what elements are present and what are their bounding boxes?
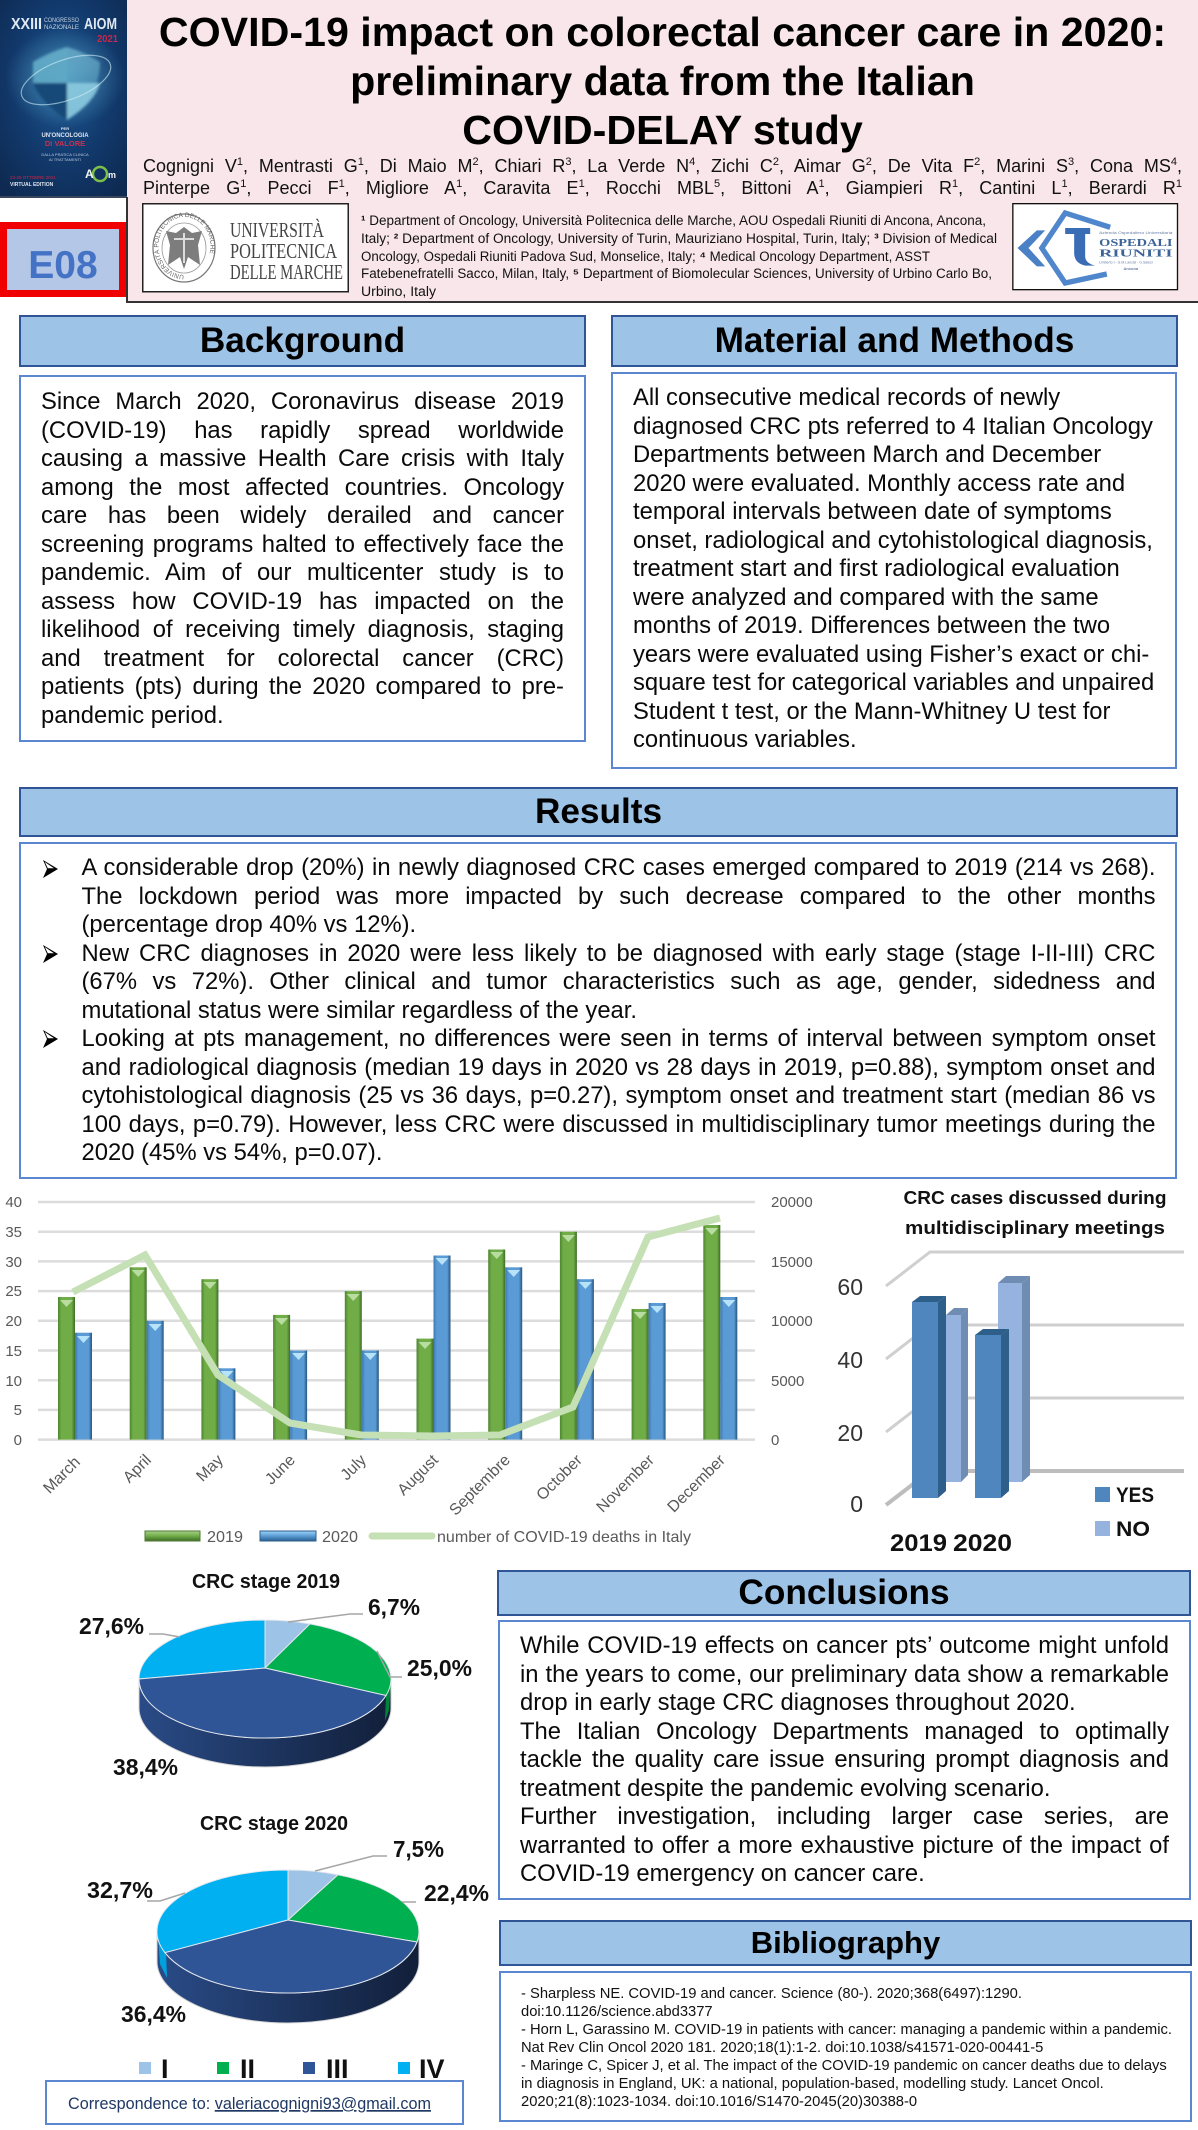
poster code badge E08 <box>0 222 126 297</box>
pie data labels <box>87 1836 489 2027</box>
results bullet text: 100 days, p=0.79). However, less CRC were discussed in multidisciplinary tumor meetings during the <box>82 1110 1156 1138</box>
panel: material and methods text <box>611 372 1177 769</box>
results bullet text: and radiological diagnosis (median 19 days in 2020 vs 28 days in 2019, p=0.88), symptom onset and <box>82 1054 1156 1080</box>
bar top highlights 2020 <box>77 1258 735 1378</box>
bullet 1 <box>43 860 58 878</box>
panel: material and methods text: continuous variables. <box>633 726 857 753</box>
pie data labels: 25,0% <box>407 1655 472 1681</box>
panel: background text: among the most affected countries. Oncology <box>41 474 564 500</box>
heading: Results: Results <box>535 792 662 831</box>
right axis: 0 <box>771 1432 779 1449</box>
pie side <box>157 1932 419 2023</box>
panel: background text: pandemic. Aim of our multicenter study is to <box>41 559 564 586</box>
2019 bars <box>58 1225 720 1440</box>
month labels: November <box>594 1451 658 1516</box>
2019 YES bar <box>912 1296 946 1498</box>
month labels: Septembre <box>446 1452 514 1519</box>
pie title: CRC stage 2019 <box>192 1571 340 1593</box>
conference poster thumbnail: DALLA PRATICA CLINICA <box>41 152 89 157</box>
conference poster thumbnail: UN'ONCOLOGIA <box>41 133 89 139</box>
title <box>159 9 1166 153</box>
year labels <box>890 1530 1012 1557</box>
pie data labels: 36,4% <box>121 2001 186 2027</box>
pie chart: CRC stage 2019 <box>79 1571 472 1780</box>
panel: material and methods text: treatment start and first radiological evaluation <box>633 555 1120 582</box>
panel: conclusions text: drop in early stage CRC diagnoses throughout 2020. <box>520 1689 1076 1716</box>
month labels: April <box>120 1452 155 1486</box>
logo: Ospedali Riuniti: OSPEDALI <box>1099 238 1173 249</box>
right axis: 10000 <box>771 1313 813 1330</box>
logo: Ospedali Riuniti: Azienda Ospedaliero Universitaria <box>1099 231 1174 235</box>
panel: material and methods text: months of 2019. Differences between the two <box>633 612 1110 639</box>
affiliations: Fatebenefratelli Sacco, Milan, Italy, ⁵ Department of Biomolecular Sciences, University of Urbino Carlo Bo, <box>361 266 992 281</box>
month labels: October <box>534 1451 586 1504</box>
month labels: July <box>338 1452 370 1484</box>
conference poster thumbnail: AIOM <box>84 16 117 33</box>
legend: YES <box>1116 1484 1154 1507</box>
bullet 3 <box>43 1030 58 1048</box>
left axis: 5 <box>14 1402 22 1419</box>
chart: monthly CRC cases and COVID-19 deaths <box>5 1194 813 1546</box>
2020 NO bar <box>998 1276 1030 1482</box>
year labels: 2019 <box>890 1530 947 1557</box>
left axis: 30 <box>5 1254 22 1271</box>
left axis: 10 <box>5 1373 22 1390</box>
panel: background text: and treatment for colorectal cancer (CRC) <box>41 644 564 672</box>
heading: Bibliography: Bibliography <box>751 1925 940 1960</box>
chart: CRC cases discussed during multidisciplinary meetings <box>837 1188 1184 1557</box>
pie chart: CRC stage 2020 <box>87 1813 489 2027</box>
panel: background text: patients (pts) during the 2020 compared to pre- <box>41 673 564 700</box>
2020 bars <box>75 1256 737 1440</box>
conference poster thumbnail: XXIII <box>11 16 42 33</box>
panel: background text: care has been widely derailed and cancer <box>41 502 564 529</box>
panel: conclusions text <box>498 1620 1191 1900</box>
legend: NO <box>1116 1518 1150 1541</box>
pie legend: stages I to IV: III <box>326 2054 349 2084</box>
affiliations: Italy; ² Department of Oncology, University of Turin, Mauriziano Hospital, Turin, Italy; ³ Division of Medical <box>361 231 997 246</box>
panel: bibliography references: Nat Rev Clin Oncol 2020 181. 2020;18(1):1-2. doi:10.1038/s41571-020-00441-5 <box>521 2040 1043 2056</box>
pie data labels: 22,4% <box>424 1880 489 1906</box>
authors: Cognigni V1, Mentrasti G1, Di Maio M2, Chiari R3, La Verde N4, Zichi C2, Aimar G2, De Vita F2, Marini S3, Cona MS4, <box>143 156 1182 176</box>
conference poster thumbnail: NAZIONALE <box>44 25 79 31</box>
legend <box>145 1529 691 1546</box>
affiliations: Oncology, Ospedali Riuniti Padova Sud, Monselice, Italy; ⁴ Medical Oncology Department, ASST <box>361 249 930 264</box>
panel: material and methods text: years were evaluated using Fisher’s exact or chi- <box>633 640 1149 668</box>
conference poster thumbnail <box>0 0 127 198</box>
value axis: 20 <box>837 1420 863 1446</box>
heading: Material and Methods <box>611 315 1178 367</box>
panel: material and methods text: Student t test, or the Mann-Whitney U test for <box>633 698 1110 724</box>
panel: bibliography references: - Maringe C, Spicer J, et al. The impact of the COVID-19 pandemic on cancer deaths due to delays <box>521 2058 1167 2074</box>
month labels: May <box>193 1452 227 1485</box>
grid lines <box>38 1202 755 1440</box>
conference poster thumbnail: PER <box>61 126 69 131</box>
conference poster thumbnail: AI TRATTAMENTI <box>49 157 81 162</box>
bullet 2 <box>43 945 58 963</box>
heading: Background: Background <box>200 321 405 360</box>
right axis <box>771 1194 813 1449</box>
value axis: 40 <box>837 1347 863 1373</box>
conference poster thumbnail: VIRTUAL EDITION <box>10 182 54 188</box>
2019 NO bar <box>946 1308 968 1482</box>
affiliations <box>361 213 997 299</box>
results bullet text: A considerable drop (20%) in newly diagnosed CRC cases emerged compared to 2019 (214 vs 268). <box>82 854 1156 881</box>
results bullet text <box>82 854 1156 1166</box>
logo: Ospedali Riuniti: Ancona <box>1124 266 1139 271</box>
heading: Conclusions: Conclusions <box>738 1573 950 1612</box>
panel: bibliography references: - Horn L, Garassino M. COVID-19 in patients with cancer: managing a pandemic within a pandemic. <box>521 2022 1172 2038</box>
panel: background text: assess how COVID-19 has impacted on the <box>41 588 564 614</box>
pie data labels: 32,7% <box>87 1877 153 1903</box>
panel: material and methods text: square test for categorical variables and unpaired <box>633 669 1154 696</box>
panel: material and methods text: onset, radiological and cytohistological diagnosis, <box>633 526 1153 554</box>
conference poster thumbnail: 2021 <box>97 34 118 45</box>
conference poster thumbnail: 23-25 OTTOBRE 2021 <box>10 175 56 180</box>
line: COVID-19 deaths <box>73 1218 720 1436</box>
panel: bibliography references: - Sharpless NE. COVID-19 and cancer. Science (80-). 2020;368(6497):1290. <box>521 1986 1022 2002</box>
panel: material and methods text: 2020 were evaluated. Monthly access rate and <box>633 470 1125 496</box>
panel: background text: Since March 2020, Coronavirus disease 2019 <box>41 388 564 415</box>
panel: conclusions text: While COVID-19 effects on cancer pts’ outcome might unfold <box>520 1632 1169 1659</box>
conference poster thumbnail: m <box>108 170 116 180</box>
pie data labels: 6,7% <box>368 1594 420 1620</box>
2020 YES bar <box>975 1329 1009 1498</box>
chart title: multidisciplinary meetings <box>905 1218 1165 1238</box>
pie legend: stages I to IV <box>139 2054 445 2084</box>
panel: background text: likelihood of receiving timely diagnosis, staging <box>41 616 564 643</box>
right axis: 15000 <box>771 1254 813 1271</box>
panel: background text: causing a massive Health Care crisis with Italy <box>41 445 564 472</box>
pie slices <box>139 1620 391 1738</box>
panel: material and methods text: diagnosed CRC pts referred to 4 Italian Oncology <box>633 412 1153 440</box>
legend: 2019 <box>207 1529 243 1546</box>
heading: Background <box>19 315 586 367</box>
left axis: 0 <box>14 1432 22 1449</box>
value axis: 60 <box>837 1274 863 1300</box>
leader lines <box>147 1856 416 1902</box>
left axis <box>5 1194 22 1449</box>
pie data labels: 38,4% <box>113 1754 178 1780</box>
results bullet text: cytohistological diagnosis (25 vs 36 days, p=0.27), symptom onset and treatment start (median 86 vs <box>82 1082 1156 1109</box>
right axis: 5000 <box>771 1373 804 1390</box>
heading: Bibliography <box>499 1920 1192 1966</box>
results bullet text: 2020 (45% vs 54%, p=0.07). <box>82 1139 382 1166</box>
month labels: March <box>40 1454 84 1497</box>
panel: bibliography references: 2020;21(8):1023-1034. doi:10.1016/S1470-2045(20)30388-0 <box>521 2094 917 2110</box>
logo: Ospedali Riuniti <box>1012 203 1178 290</box>
title: COVID-DELAY study <box>462 107 863 153</box>
panel: material and methods text: were analyzed and compared with the same <box>633 584 1099 610</box>
bar top highlights 2019 <box>60 1228 718 1349</box>
right axis: 20000 <box>771 1194 813 1211</box>
logo: Ospedali Riuniti: Umberto I - G.M.Lancisi - G.Salesi <box>1099 260 1153 264</box>
pie data labels: 7,5% <box>393 1836 444 1862</box>
3D grid <box>886 1252 1184 1432</box>
panel: background text: screening programs halted to effectively face the <box>41 530 564 558</box>
panel: material and methods text: Departments between March and December <box>633 441 1101 468</box>
pie side <box>139 1679 391 1767</box>
panel: background text: (COVID-19) has rapidly spread worldwide <box>41 416 564 444</box>
logo: Università Politecnica delle Marche: UNIVERSITÀ POLITECNICA DELLE MARCHE <box>154 212 215 280</box>
panel: bibliography references: in diagnosis in England, UK: a national, population-based, modelling study. Lancet Oncol. <box>521 2076 1104 2092</box>
logo: Università Politecnica delle Marche <box>142 203 349 292</box>
results bullet text: Looking at pts management, no differences were seen in terms of interval between symptom onset <box>82 1025 1156 1052</box>
left axis: 25 <box>5 1283 22 1300</box>
pie legend: stages I to IV: I <box>161 2054 169 2084</box>
heading: Material and Methods: Material and Methods <box>715 321 1074 360</box>
value axis: 0 <box>850 1491 863 1517</box>
legend <box>1095 1484 1154 1541</box>
legend: number of COVID-19 deaths in Italy <box>437 1529 691 1546</box>
results bullet text: New CRC diagnoses in 2020 were less likely to be diagnosed with early stage (stage I-II-III) CRC <box>82 940 1156 966</box>
panel: background text: pandemic period. <box>41 702 224 728</box>
results bullet text: (67% vs 72%). Other clinical and tumor characteristics such as age, gender, sidedness and <box>82 968 1156 995</box>
panel: conclusions text: in the years to come, our preliminary data show a remarkable <box>520 1660 1169 1688</box>
panel: conclusions text: Further investigation, including larger case series, are <box>520 1803 1169 1830</box>
poster code badge E08: E08 <box>28 244 98 286</box>
panel: conclusions text: The Italian Oncology Departments managed to optimally <box>520 1718 1169 1744</box>
heading: Results <box>19 787 1178 837</box>
conference poster thumbnail: DI VALORE <box>45 139 85 148</box>
pie data labels <box>79 1594 472 1780</box>
pie legend: stages I to IV: II <box>240 2054 255 2084</box>
pie slices <box>157 1870 419 1993</box>
heading: Conclusions <box>497 1570 1191 1616</box>
panel: material and methods text: temporal intervals between date of symptoms <box>633 498 1112 525</box>
results bullet text: (percentage drop 40% vs 12%). <box>82 911 416 938</box>
panel: conclusions text: warranted to offer a more exhaustive picture of the impact of <box>520 1832 1169 1858</box>
chart title: CRC cases discussed during <box>904 1188 1166 1208</box>
panel: bibliography references <box>499 1971 1192 2122</box>
leader lines <box>149 1614 402 1677</box>
pie title: CRC stage 2020 <box>200 1813 348 1835</box>
conference poster thumbnail: CONGRESSO <box>44 18 79 24</box>
logo: Ospedali Riuniti: RIUNITI <box>1099 249 1173 260</box>
month labels: December <box>665 1451 729 1516</box>
authors <box>143 156 1182 198</box>
chart title <box>904 1188 1166 1238</box>
correspondence box <box>45 2080 464 2125</box>
panel: material and methods text: All consecutive medical records of newly <box>633 384 1060 411</box>
affiliations: Urbino, Italy <box>361 284 436 299</box>
month labels <box>40 1451 729 1519</box>
panel: conclusions text: tackle the quality care issue ensuring prompt diagnosis and <box>520 1746 1169 1773</box>
left axis: 15 <box>5 1343 22 1360</box>
year labels: 2020 <box>953 1530 1012 1557</box>
pie legend: stages I to IV: IV <box>419 2054 445 2084</box>
pie data labels: 27,6% <box>79 1613 144 1639</box>
panel: results text <box>19 842 1177 1179</box>
affiliations: ¹ Department of Oncology, Università Politecnica delle Marche, AOU Ospedali Riuniti di Ancona, Ancona, <box>361 213 986 228</box>
title: COVID-19 impact on colorectal cancer care in 2020: <box>159 9 1166 55</box>
authors: Pinterpe G1, Pecci F1, Migliore A1, Caravita E1, Rocchi MBL5, Bittoni A1, Giampieri R1, Cantini L1, Berardi R1 <box>143 178 1182 198</box>
title: preliminary data from the Italian <box>350 58 975 104</box>
results bullet text: The lockdown period was more impacted by such decrease compared to the other months <box>82 882 1156 910</box>
panel: bibliography references: doi:10.1126/science.abd3377 <box>521 2004 713 2020</box>
month labels: June <box>262 1452 299 1488</box>
left axis: 40 <box>5 1194 22 1211</box>
panel: conclusions text: COVID-19 emergency on cancer care. <box>520 1860 925 1887</box>
value axis <box>837 1274 863 1517</box>
panel: background text <box>19 375 586 742</box>
conference poster thumbnail: A <box>85 167 94 181</box>
left axis: 35 <box>5 1224 22 1241</box>
correspondence box: Correspondence to: valeriacognigni93@gmail.com <box>68 2094 431 2113</box>
panel: conclusions text: treatment despite the pandemic evolving scenario. <box>520 1774 1050 1802</box>
results bullet text: mutational status were similar regardless of the year. <box>82 996 637 1024</box>
legend: 2020 <box>322 1529 358 1546</box>
header panel <box>127 0 1198 303</box>
month labels: August <box>395 1451 442 1499</box>
left axis: 20 <box>5 1313 22 1330</box>
